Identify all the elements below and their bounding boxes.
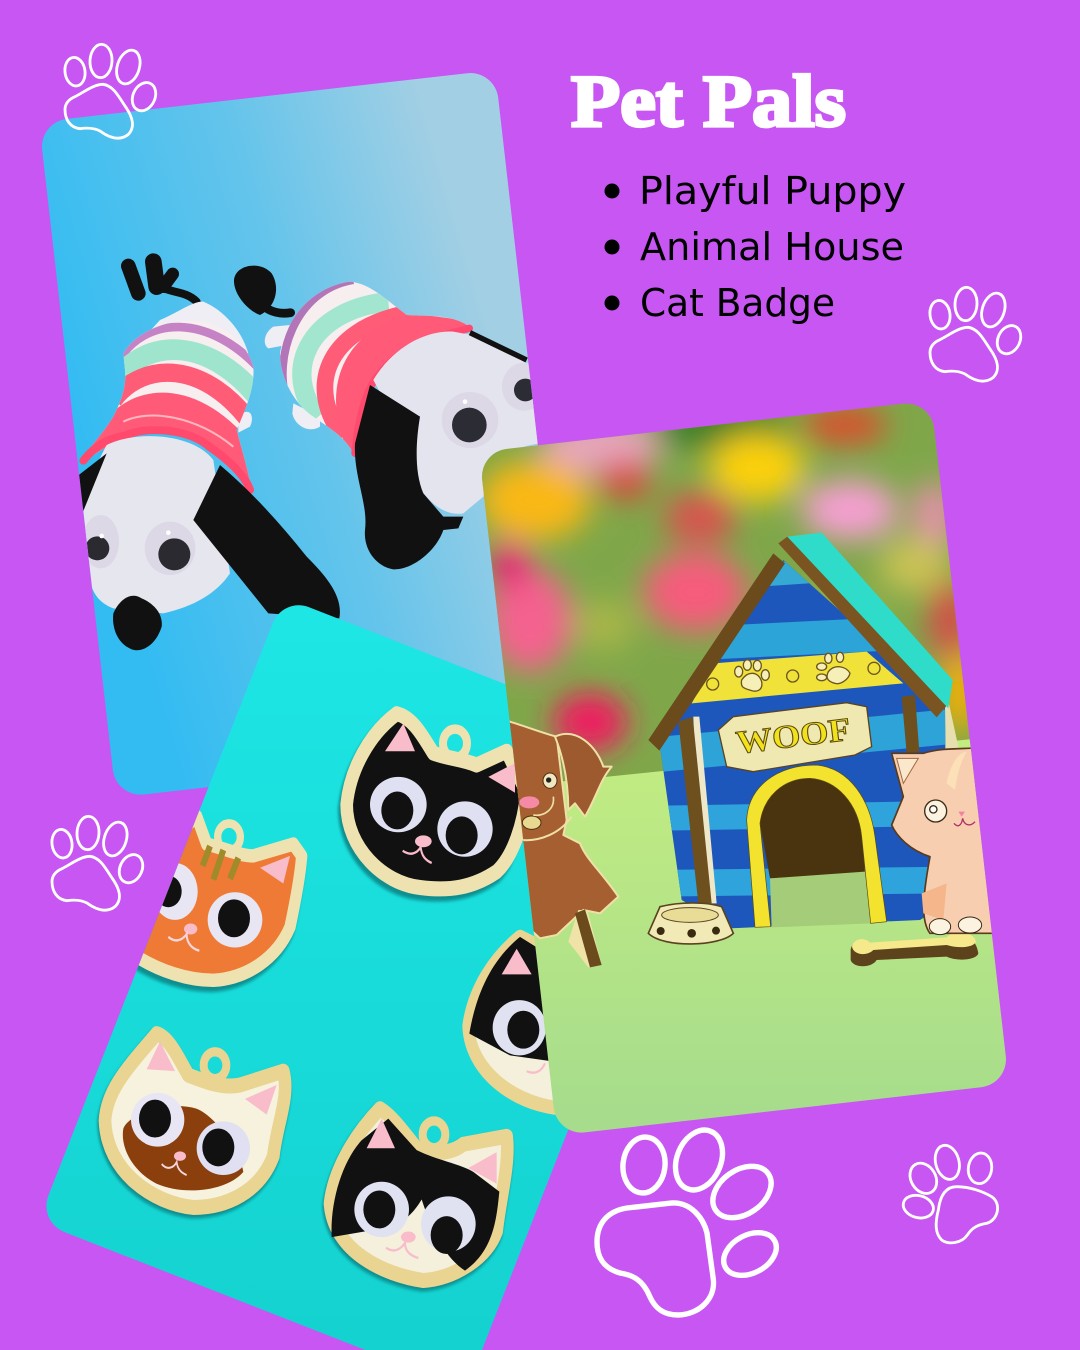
sock cuff ruffle: [355, 328, 469, 453]
cat badges: [104, 714, 580, 1284]
list item: Playful Puppy: Playful Puppy: [639, 169, 906, 213]
puppy head: [373, 332, 540, 514]
door opening: [760, 778, 865, 878]
bullet list: [604, 169, 906, 325]
icon: paw bottom right: [901, 1143, 998, 1243]
right sock puppy: [234, 266, 546, 569]
nose: [113, 596, 162, 650]
woof sign: WOOF: [734, 712, 853, 762]
back wall: [945, 704, 958, 748]
band ornaments: [707, 662, 880, 690]
teal backdrop: [46, 605, 568, 1350]
teal roof: [787, 533, 953, 708]
right pillar: [902, 695, 919, 753]
pipe cleaner tail: [264, 306, 295, 318]
googly eyes: [82, 515, 119, 568]
title: Pet Pals: [571, 61, 846, 143]
sock cuff ruffle: [83, 430, 250, 490]
left paw ornament: [735, 660, 769, 691]
woof sign: [718, 703, 872, 772]
panel: cat badge photo: [46, 605, 568, 1350]
painted stripes: [660, 560, 946, 928]
photo backdrop: [42, 73, 538, 795]
bone: [851, 933, 978, 966]
tuxedo cat badge: [329, 1109, 507, 1284]
siamese cat badge: [104, 1034, 285, 1211]
right paw ornament: [817, 652, 850, 684]
green floor: [517, 739, 1006, 1133]
left pillar: [678, 717, 717, 903]
ear: [355, 385, 463, 569]
black cat badge: [345, 714, 527, 894]
icon: large paw bottom: [597, 1123, 784, 1315]
panel: sock puppy photo: [42, 73, 538, 795]
list item: Cat Badge: Cat Badge: [640, 281, 835, 325]
brown dog cutout: [497, 720, 618, 967]
ears: [193, 465, 340, 618]
door frame: [747, 765, 887, 927]
icon: paw right of list: [928, 287, 1025, 381]
left sock puppy: [70, 262, 340, 650]
pipe cleaner tail: [128, 262, 197, 302]
roof boards: [648, 553, 785, 751]
striped sock body: [91, 321, 254, 480]
list item: Animal House: Animal House: [640, 225, 904, 269]
blurred flower backdrop: [482, 404, 982, 840]
icon: paw left middle: [50, 816, 147, 910]
puppy head: [82, 436, 230, 613]
orange tabby badge: [105, 816, 302, 985]
dog house: [497, 533, 1020, 967]
dog stand: [568, 910, 602, 967]
icon: paw top left: [63, 44, 160, 138]
food bowl: [648, 903, 733, 944]
googly eyes: [442, 392, 498, 448]
striped sock body: [280, 282, 467, 450]
panel: wooden dog house photo: [482, 404, 1006, 1133]
peach kitten cutout: [892, 747, 1020, 935]
partial cat badge: [468, 937, 580, 1109]
